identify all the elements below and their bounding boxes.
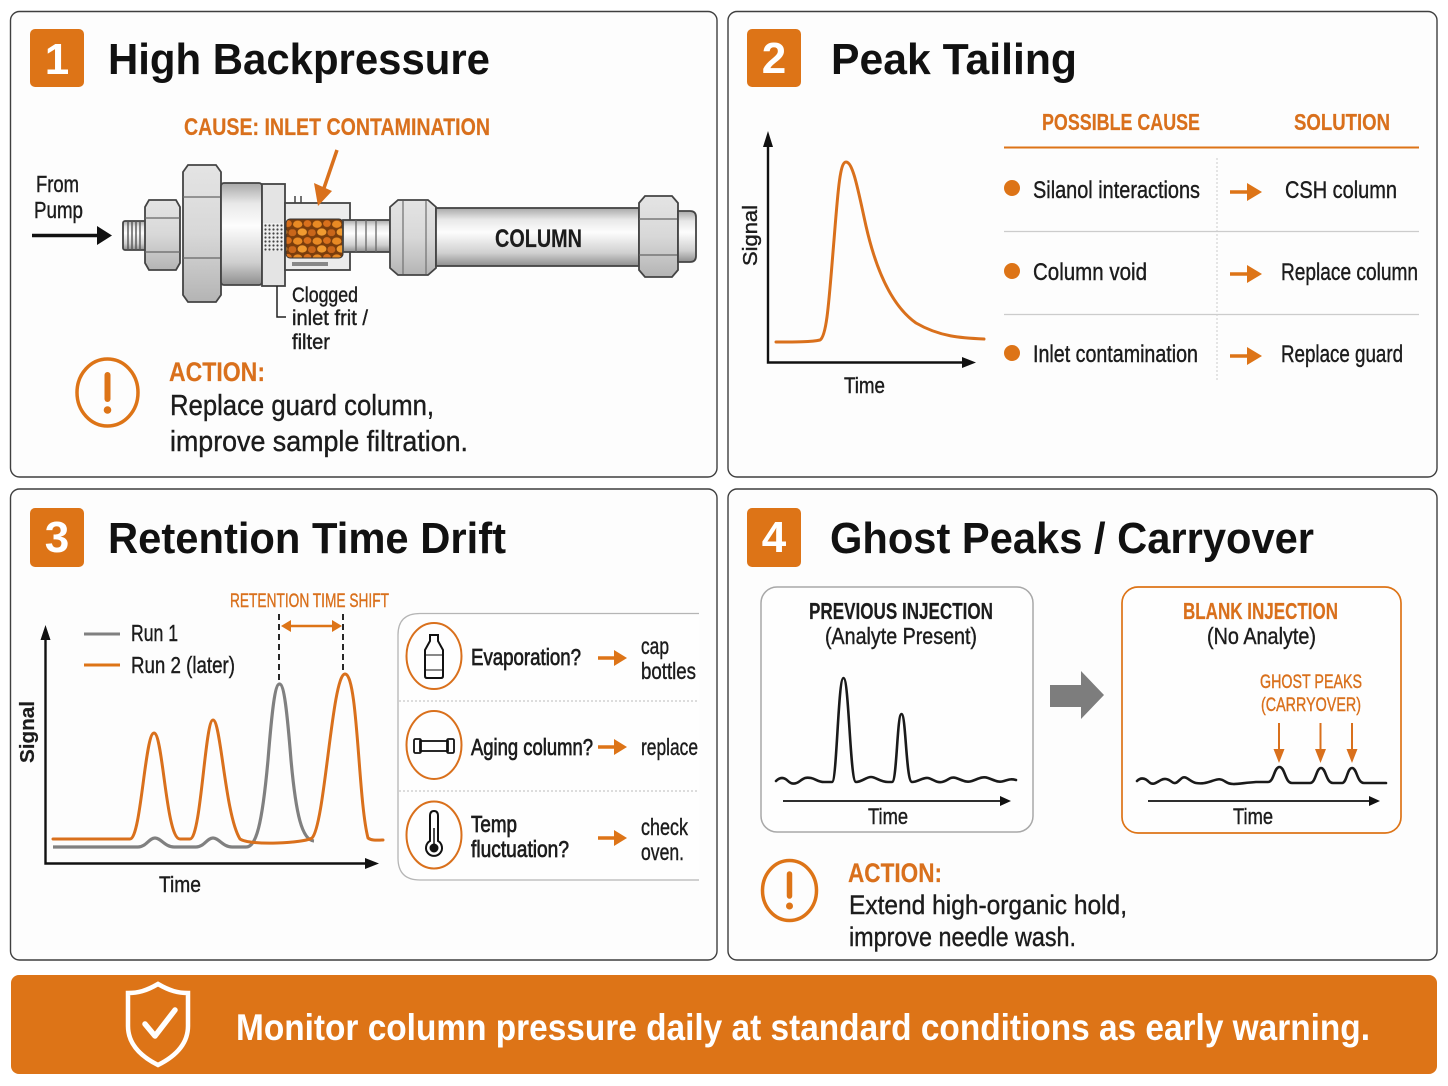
row: temperature: Temp [471,811,517,837]
row: aging column [406,711,698,779]
row: evaporation: Evaporation? [471,644,581,670]
previous injection box: PREVIOUS INJECTION [809,598,993,624]
shift label: RETENTION TIME SHIFT [230,591,389,612]
action text: improve needle wash. [849,922,1076,952]
previous injection box: Time [868,804,908,829]
end nut [639,196,678,277]
row: inlet contamination [1004,341,1403,368]
thread [123,221,146,250]
frit plate [262,184,285,286]
x label: Time [159,872,201,897]
row: inlet contamination: Replace guard [1281,341,1403,368]
clogged frit label: Clogged [292,284,358,307]
row: aging column: replace [641,734,698,760]
panel: peak tailing [728,12,1437,477]
badge 1: 1 [45,35,69,84]
ghost peaks label [1260,672,1362,716]
badge 2: 2 [762,34,786,83]
blank injection box [1122,587,1401,833]
from pump label [34,171,83,223]
column headers: SOLUTION [1294,109,1390,135]
action text: Extend high-organic hold, [849,890,1127,920]
stem [343,220,390,252]
action text [169,357,468,458]
column assembly diagram [123,165,696,302]
chart: tailing peak [740,131,984,398]
blank injection box: (No Analyte) [1207,623,1316,649]
action text: ACTION: [169,357,265,387]
time axis [783,796,1011,806]
icon: alert [762,860,816,920]
row: column void: Column void [1033,259,1147,286]
run 1 trace [53,684,314,847]
from pump label: Pump [34,197,83,223]
column headers: POSSIBLE CAUSE [1042,109,1200,135]
clogged frit label: filter [292,331,330,354]
legend [84,620,235,678]
column tube [436,208,639,266]
panel: high backpressure [10,12,717,477]
action text: Replace guard column, [170,390,434,422]
row: silanol: Silanol interactions [1033,177,1200,204]
time axis [1148,796,1380,806]
row: silanol [1004,177,1397,204]
icon: column [406,711,462,779]
arrow: flow from pump [32,234,98,237]
badge 4: 4 [762,513,787,562]
clogged frit leader [277,286,286,317]
action text [848,858,1127,952]
arrowhead [97,226,112,245]
previous injection box: (Analyte Present) [825,623,977,649]
row: temperature: oven. [641,839,684,865]
heading: high backpressure: High Backpressure [108,35,490,84]
row: evaporation: bottles [641,658,696,684]
cause arrow [314,150,337,206]
ghost peaks label: (CARRYOVER) [1261,695,1361,716]
from pump label: From [36,171,79,197]
action text: improve sample filtration. [170,426,468,458]
row: temperature: fluctuation? [471,836,569,862]
heading: ghost peaks: Ghost Peaks / Carryover [830,514,1314,563]
cause label: CAUSE: INLET CONTAMINATION [184,114,490,141]
row: inlet contamination: Inlet contamination [1033,341,1198,368]
column label: COLUMN [495,225,582,253]
end cap [678,211,696,262]
blank injection box: BLANK INJECTION [1183,598,1338,624]
axes [763,131,976,368]
row: temperature [406,802,688,868]
clogged frit label [292,284,368,354]
row: column void: Replace column [1281,259,1418,286]
badge 2 [747,29,801,87]
icon: bottle [406,623,462,689]
action text: ACTION: [848,858,942,888]
union body [221,183,262,285]
ghost peaks label: GHOST PEAKS [1260,672,1362,693]
chart: retention shift [17,591,389,897]
arrow between injections [1050,671,1104,719]
blank injection box: Time [1233,804,1273,829]
tailing curve [776,162,984,342]
shift arrow [281,620,342,632]
previous injection box [761,587,1033,832]
badge 1 [30,29,84,87]
banner: key takeaway [11,975,1437,1074]
row: silanol: CSH column [1285,177,1397,204]
run 2 trace [53,674,383,843]
large hex nut [183,165,221,302]
badge 4 [747,508,801,567]
ghost arrows [1274,723,1358,763]
row: evaporation: cap [641,633,669,659]
row: evaporation [406,623,696,689]
icon: shield check [128,984,188,1065]
troubleshooting list [398,614,699,880]
inlet nut [145,200,180,270]
heading: peak tailing: Peak Tailing [831,35,1077,84]
icon: thermometer [406,802,462,868]
blank chromatogram [1137,767,1386,784]
row: column void [1004,259,1418,286]
panel: ghost peaks [728,489,1437,960]
y label: Signal [740,205,762,266]
icon: alert [77,359,138,426]
row: temperature: check [641,814,688,840]
legend: Run 1 [131,620,178,646]
heading: retention time drift: Retention Time Drift [108,514,506,563]
legend: Run 2 (later) [131,652,235,678]
clogged frit label: inlet frit / [292,307,368,330]
row: aging column: Aging column? [471,734,593,760]
axes [40,625,379,869]
badge 3: 3 [45,513,69,562]
y label: Signal [17,701,39,763]
shift guides [279,614,343,684]
cutaway housing [285,196,350,270]
column nut [390,200,436,275]
chromatogram [776,678,1016,784]
badge 3 [30,508,84,567]
column headers [1042,109,1390,135]
x label: Time [844,373,885,398]
table: causes and solutions [1004,109,1419,382]
panel: retention time drift [10,489,717,960]
